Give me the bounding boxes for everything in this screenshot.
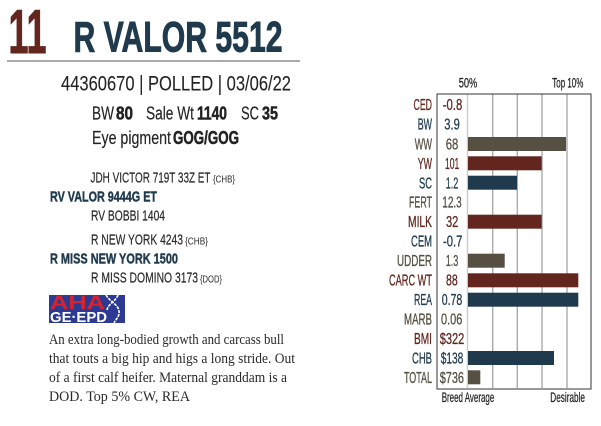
trait values: 0.78	[442, 292, 462, 309]
chart frame	[437, 94, 591, 389]
pedigree: R MISS DOMINO 3173	[91, 270, 198, 287]
trait values: 101	[445, 156, 459, 173]
trait values: 1.3	[446, 253, 458, 270]
trait values: -0.7	[443, 234, 462, 251]
trait labels: CHB	[412, 350, 432, 367]
chart footer labels	[442, 389, 585, 405]
pedigree: R NEW YORK 4243	[91, 231, 183, 248]
pedigree: {CHB}	[213, 174, 235, 186]
trait labels: CARC WT	[389, 272, 432, 290]
chart footer labels: Breed Average	[442, 389, 494, 405]
trait labels	[389, 97, 432, 387]
EPD chart	[389, 75, 591, 405]
trait labels: MARB	[404, 311, 432, 328]
trait values: $138	[441, 350, 463, 367]
trait labels: CEM	[411, 234, 432, 251]
pedigree: {CHB}	[185, 235, 208, 247]
trait values	[440, 97, 464, 387]
trait values: 88	[446, 272, 458, 290]
stats: birth weight, sale weight, scrotal	[92, 103, 278, 124]
trait labels: FERT	[409, 195, 432, 212]
trait values: 1.2	[446, 175, 458, 192]
trait values: 3.9	[444, 116, 460, 134]
description: of a first calf heifer. Maternal granddam is a	[49, 370, 287, 386]
description: An extra long-bodied growth and carcass bull	[49, 332, 284, 348]
header: lot number and name	[8, 0, 282, 67]
eye pigment: GOG/GOG	[173, 127, 239, 148]
stats: birth weight, sale weight, scrotal: BW	[92, 103, 114, 124]
trait values: 68	[446, 136, 458, 154]
trait values: 12.3	[442, 195, 462, 212]
trait values: 0.06	[441, 311, 462, 328]
pedigree: RV BOBBI 1404	[91, 208, 165, 225]
logo: AHA GE-EPD	[49, 293, 125, 326]
trait values: 32	[446, 214, 458, 231]
pedigree	[50, 170, 235, 287]
trait labels: TOTAL	[404, 370, 432, 387]
stats: birth weight, sale weight, scrotal: 1140	[197, 103, 227, 124]
trait labels: SC	[419, 175, 432, 192]
title: R VALOR 5512	[74, 14, 282, 62]
stats: birth weight, sale weight, scrotal: 80	[116, 103, 133, 124]
trait labels: BMI	[414, 331, 432, 348]
trait values: -0.8	[443, 97, 462, 114]
trait labels: BW	[418, 116, 432, 134]
eye pigment	[92, 127, 239, 148]
trait labels: MILK	[408, 214, 432, 231]
description: DOD. Top 5% CW, REA	[49, 389, 190, 405]
chart header labels	[459, 75, 583, 91]
trait labels: YW	[418, 156, 432, 173]
trait values: $322	[440, 331, 464, 348]
logo: AHA GE-EPD: GE·EPD	[50, 309, 107, 326]
stats: birth weight, sale weight, scrotal: 35	[262, 103, 278, 124]
lot number: 11	[8, 0, 46, 67]
pedigree: RV VALOR 9444G ET	[50, 188, 157, 205]
pedigree: JDH VICTOR 719T 33Z ET	[90, 170, 210, 187]
stats: birth weight, sale weight, scrotal: Sale Wt	[146, 103, 194, 124]
eye pigment: Eye pigment	[92, 127, 171, 148]
chart header labels: 50%	[459, 75, 477, 91]
trait labels: CED	[414, 97, 432, 114]
pedigree: R MISS NEW YORK 1500	[50, 251, 178, 268]
stats: birth weight, sale weight, scrotal: SC	[241, 103, 259, 124]
trait values: $736	[440, 370, 464, 387]
bars	[468, 137, 578, 384]
registration line: 44360670 | POLLED | 03/06/22	[61, 72, 291, 96]
trait labels: UDDER	[397, 253, 432, 270]
description: that touts a big hip and higs a long stride. Out	[49, 351, 296, 367]
logo: AHA GE-EPD: AHA	[50, 293, 105, 314]
pedigree: {DOD}	[200, 274, 222, 286]
trait labels: REA	[414, 292, 432, 309]
trait labels: WW	[415, 136, 432, 154]
description	[49, 332, 296, 405]
